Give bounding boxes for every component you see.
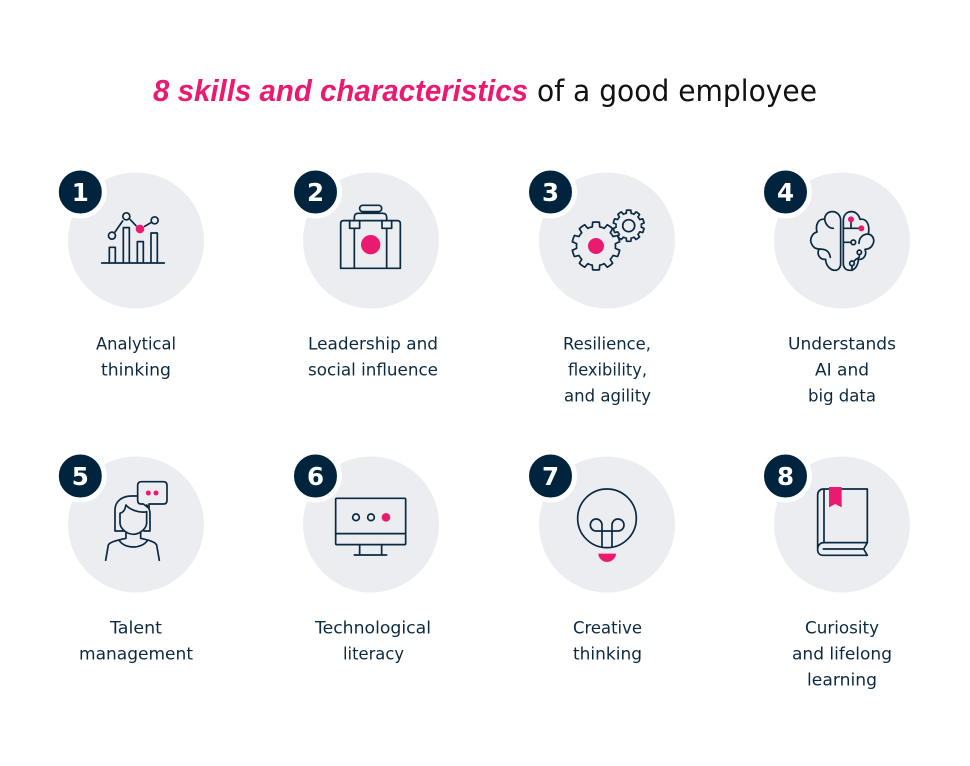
number badge 8: 8	[777, 462, 794, 491]
number badge 4: 4	[777, 178, 794, 207]
label: understands AI and big data: AI and	[815, 360, 869, 380]
number badge 2: 2	[307, 178, 324, 207]
number badge 1: 1	[72, 178, 89, 207]
label: understands AI and big data: big data	[808, 386, 876, 406]
number badge 6: 6	[307, 462, 324, 491]
icon: light bulb	[578, 489, 636, 562]
label: resilience: flexibility,	[568, 360, 647, 380]
panel: skill 2 leadership	[292, 168, 439, 380]
icon: bar chart with line	[102, 213, 164, 263]
label: curiosity and lifelong learning	[792, 618, 892, 690]
icon: gears	[571, 210, 645, 270]
label: understands AI and big data: Understands	[788, 334, 896, 354]
label: technological literacy: literacy	[343, 644, 404, 664]
label: analytical thinking: Analytical	[96, 334, 176, 354]
icon: monitor	[336, 498, 406, 555]
title: 8 skills and characteristics	[153, 73, 528, 108]
title	[153, 73, 817, 108]
panel: skill 6 technological literacy	[292, 452, 439, 664]
label: resilience	[563, 334, 651, 406]
panel: skill 7 creative thinking	[526, 452, 675, 664]
label: resilience: Resilience,	[563, 334, 651, 354]
number badge 4	[762, 168, 810, 216]
title: of a good employee	[537, 74, 817, 108]
number badge 3: 3	[542, 178, 559, 207]
label: creative thinking	[573, 618, 642, 664]
label: resilience: and agility	[564, 386, 651, 406]
panel: skill 1 analytical thinking	[56, 168, 204, 380]
panel: skill 4 AI and big data	[762, 168, 910, 406]
number badge 5	[56, 452, 104, 500]
panel: skill 8 curiosity and lifelong learning	[762, 452, 910, 690]
number badge 2	[292, 168, 340, 216]
label: curiosity and lifelong learning: learning	[807, 670, 877, 690]
label: analytical thinking	[96, 334, 176, 380]
label: technological literacy	[314, 618, 431, 664]
icon: brain	[811, 212, 874, 270]
label: creative thinking: Creative	[573, 618, 642, 638]
number badge 5: 5	[72, 462, 89, 491]
number badge 7	[526, 452, 574, 500]
label: technological literacy: Technological	[314, 618, 431, 638]
icon: person with speech bubble	[106, 482, 167, 560]
label: leadership and social influence: social influence	[308, 360, 438, 380]
label: talent management	[79, 618, 193, 664]
label: leadership and social influence: Leadership and	[308, 334, 438, 354]
panel: skill 5 talent management	[56, 452, 204, 664]
label: understands AI and big data	[788, 334, 896, 406]
icon: book with bookmark	[818, 487, 867, 555]
label: curiosity and lifelong learning: and lifelong	[792, 644, 892, 664]
label: curiosity and lifelong learning: Curiosity	[805, 618, 879, 638]
number badge 6	[292, 452, 340, 500]
number badge 3	[526, 168, 574, 216]
panel: skill 3 resilience	[526, 168, 675, 406]
label: talent management: management	[79, 644, 193, 664]
label: creative thinking: thinking	[573, 644, 642, 664]
number badge 1	[56, 168, 104, 216]
number badge 7: 7	[542, 462, 559, 491]
label: leadership and social influence	[308, 334, 438, 380]
icon: briefcase	[341, 205, 400, 268]
number badge 8	[762, 452, 810, 500]
label: talent management: Talent	[109, 618, 162, 638]
label: analytical thinking: thinking	[101, 360, 171, 380]
